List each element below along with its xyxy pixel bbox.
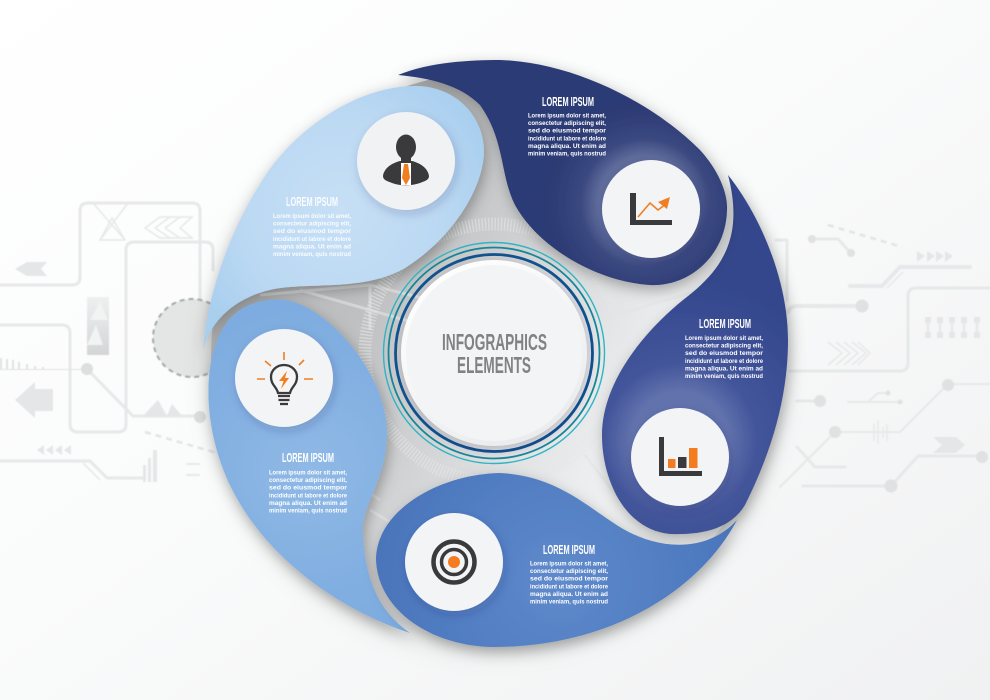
title: INFOGRAPHICS: [442, 329, 547, 355]
center disc: [401, 260, 587, 446]
concentric rings: [384, 242, 604, 464]
body text: incididunt ut labore et dolore: [269, 492, 347, 499]
dashed circle: [153, 299, 231, 377]
icon circle: target: [405, 513, 503, 611]
body text: Lorem ipsum dolor sit amet,: [528, 112, 606, 120]
icon circle: bar chart: [631, 408, 729, 506]
body text: minim veniam, quis nostrud: [528, 150, 606, 158]
body text: sed do eiusmod tempor: [273, 228, 351, 235]
body text: incididunt ut labore et dolore: [528, 135, 606, 142]
icon circle: growth chart: [602, 160, 700, 258]
body text: minim veniam, quis nostrud: [685, 373, 763, 380]
segment: top-right dark navy drop: [398, 60, 727, 285]
body text: incididunt ut labore et dolore: [685, 358, 763, 365]
segment: left mid-blue drop: [208, 300, 410, 633]
body text: magna aliqua. Ut enim ad: [685, 365, 763, 372]
segment: bottom-right navy-blue drop: [602, 175, 788, 534]
body text: Lorem ipsum dolor sit amet,: [269, 470, 347, 476]
body text: minim veniam, quis nostrud: [530, 598, 608, 606]
body text: sed do eiusmod tempor: [528, 128, 606, 135]
right circuit background pattern: [776, 225, 990, 492]
body text: magna aliqua. Ut enim ad: [528, 143, 606, 150]
body text: sed do eiusmod tempor: [685, 350, 763, 357]
body text: magna aliqua. Ut enim ad: [269, 500, 347, 507]
segment: top-left light blue drop: [203, 86, 484, 350]
body text: consectetur adipiscing elit,: [528, 120, 606, 127]
body text: sed do eiusmod tempor: [269, 485, 347, 492]
body text: [273, 213, 351, 258]
segment: bottom blue drop: [376, 473, 737, 647]
heading: LOREM IPSUM: [699, 316, 751, 331]
body text: consectetur adipiscing elit,: [685, 343, 763, 350]
body text: minim veniam, quis nostrud: [269, 508, 347, 514]
icon circle: light bulb: [235, 329, 333, 427]
body text: minim veniam, quis nostrud: [273, 251, 351, 258]
body text: incididunt ut labore et dolore: [530, 583, 608, 590]
body text: Lorem ipsum dolor sit amet,: [273, 213, 351, 220]
heading: LOREM IPSUM: [542, 94, 594, 109]
center emblem: ELEMENTS: [457, 352, 531, 378]
heading: LOREM IPSUM: [543, 542, 595, 557]
left circuit background pattern: [0, 203, 231, 482]
body text: magna aliqua. Ut enim ad: [273, 243, 351, 250]
infographic wheel: [203, 60, 788, 647]
body text: [528, 112, 606, 158]
heading: LOREM IPSUM: [282, 450, 334, 465]
gray base disc with gear pattern: [211, 72, 779, 640]
body text: sed do eiusmod tempor: [530, 576, 608, 583]
icon circle: businessman: [357, 112, 455, 210]
body text: [685, 335, 763, 380]
body text: incididunt ut labore et dolore: [273, 236, 351, 243]
body text: consectetur adipiscing elit,: [273, 221, 351, 228]
body text: magna aliqua. Ut enim ad: [530, 591, 608, 598]
body text: [269, 470, 347, 514]
body text: [530, 560, 608, 606]
heading: LOREM IPSUM: [286, 194, 338, 209]
body text: Lorem ipsum dolor sit amet,: [530, 560, 608, 568]
body text: consectetur adipiscing elit,: [530, 568, 608, 575]
body text: Lorem ipsum dolor sit amet,: [685, 335, 763, 342]
body text: consectetur adipiscing elit,: [269, 477, 347, 484]
center emblem: [384, 242, 604, 464]
